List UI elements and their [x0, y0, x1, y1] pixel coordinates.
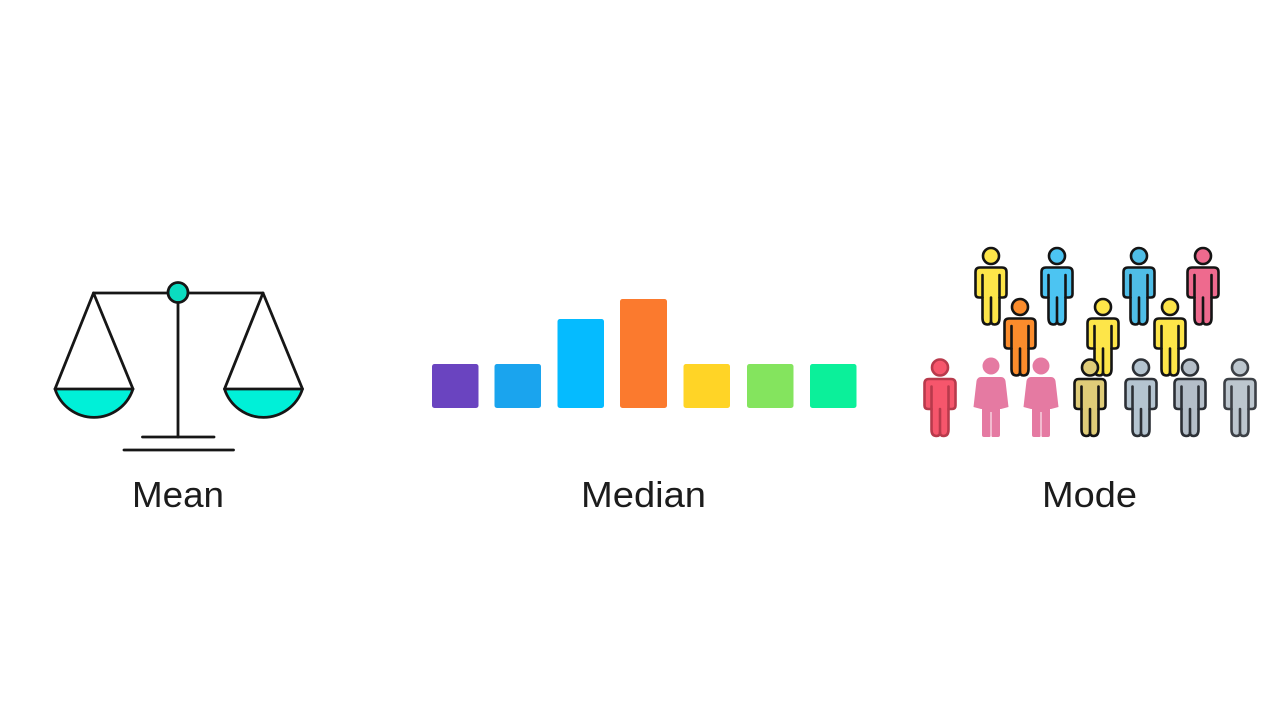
label: Median: Median [581, 474, 706, 515]
label: Mode: Mode [1042, 474, 1137, 515]
icon: balance scale [55, 282, 302, 450]
icon: crowd of people [924, 248, 1256, 437]
panel: median [432, 299, 856, 515]
panel: mode [924, 248, 1256, 515]
panel: mean [55, 282, 302, 515]
label: Mean: Mean [132, 474, 224, 515]
bar chart [432, 299, 856, 408]
